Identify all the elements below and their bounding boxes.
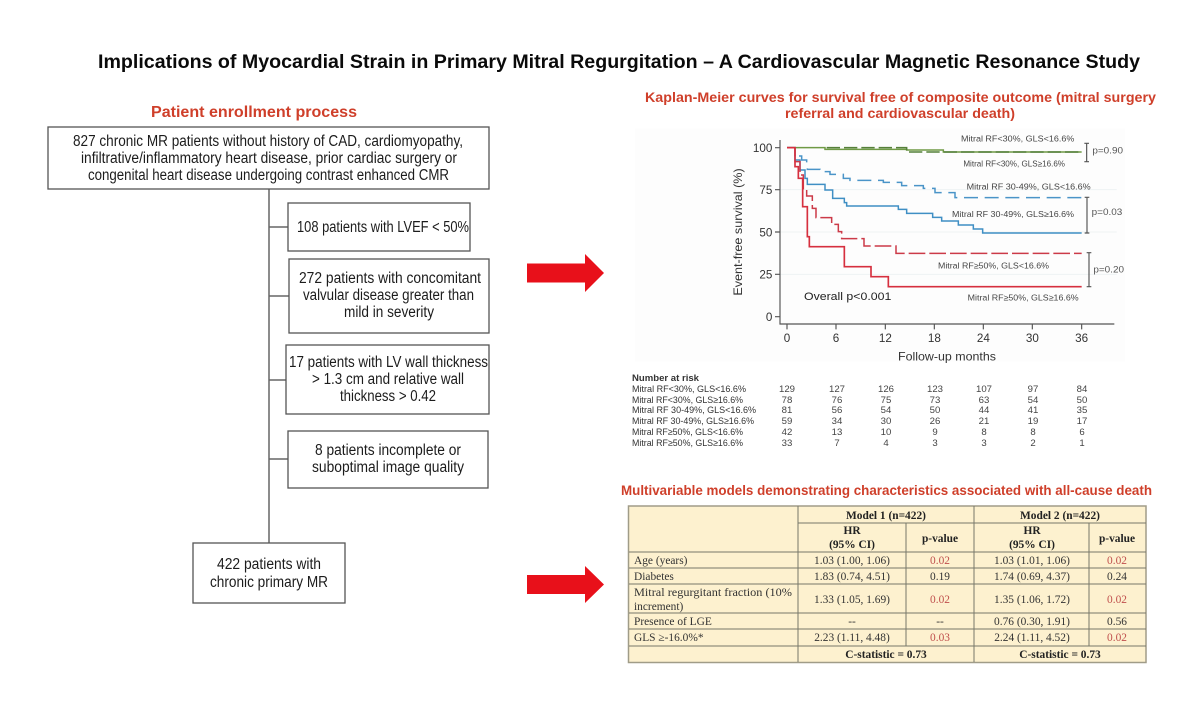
table: number at risk: 26 <box>930 416 940 427</box>
table: number at risk: 84 <box>1077 384 1088 395</box>
table: number at risk: 56 <box>832 405 842 416</box>
heading: Kaplan-Meier curves <box>645 90 1156 121</box>
model 1 values: 0.02 <box>930 555 950 567</box>
model 1 values: 1.03 (1.00, 1.06) <box>814 555 890 567</box>
table: number at risk: 42 <box>782 427 792 438</box>
heading: multivariable models: Multivariable models demonstrating characteristics associated with all-cause death <box>621 483 1152 498</box>
panel: patient enrollment flowchart <box>48 104 489 603</box>
x axis tick labels: 12 <box>879 332 892 345</box>
box: image quality exclusion: suboptimal image quality <box>312 459 464 476</box>
arrow: to Kaplan-Meier curves <box>527 254 604 292</box>
box: valvular disease exclusion: mild in severity <box>344 304 434 321</box>
table: number at risk: 41 <box>1028 405 1038 416</box>
table: number at risk: Number at risk <box>632 372 700 383</box>
box: LVEF exclusion <box>288 203 470 251</box>
model 2 values: 0.24 <box>1107 571 1127 583</box>
table header: Model 1 (n=422) <box>846 510 926 522</box>
title: Implications of Myocardial Strain in Primary Mitral Regurgitation – A Cardiovascular Magnetic Resonance Study <box>98 52 1140 73</box>
curve labels: Mitral RF<30%, GLS<16.6% <box>961 134 1075 144</box>
y axis title: Event-free survival (%) <box>732 168 745 296</box>
table: number at risk: Mitral RF<30%, GLS≥16.6% <box>632 394 743 405</box>
curve labels: Mitral RF<30%, GLS≥16.6% <box>963 158 1066 168</box>
heading: Kaplan-Meier curves: Kaplan-Meier curves for survival free of composite outcome (mitral surgery <box>645 90 1156 105</box>
table: number at risk: Mitral RF≥50%, GLS≥16.6% <box>632 437 743 448</box>
table header: Model 2 (n=422) <box>1020 510 1100 522</box>
table: number at risk: 76 <box>832 395 842 406</box>
table: number at risk: Mitral RF 30-49%, GLS≥16.6% <box>632 415 754 426</box>
curve labels: Mitral RF 30-49%, GLS<16.6% <box>967 181 1091 191</box>
table header <box>829 510 1135 551</box>
table: number at risk: 75 <box>881 395 891 406</box>
y axis tick labels: 75 <box>759 184 772 197</box>
box: final cohort: 422 patients with <box>217 556 321 573</box>
curve labels: Mitral RF≥50%, GLS<16.6% <box>938 260 1050 270</box>
brackets with p-values <box>1084 143 1124 287</box>
box: final cohort <box>193 543 345 603</box>
table: number at risk: 127 <box>829 384 845 395</box>
model 1 values: 1.33 (1.05, 1.69) <box>814 594 890 606</box>
table: number at risk: 97 <box>1028 384 1038 395</box>
x axis tick labels: 18 <box>928 332 941 345</box>
table header: p-value <box>922 533 958 545</box>
table: number at risk: 1 <box>1079 438 1085 449</box>
arrow: to multivariable table <box>527 566 604 603</box>
model 2 values: 0.56 <box>1107 616 1127 628</box>
row labels: Age (years) <box>634 555 688 567</box>
model 2 values: 2.24 (1.11, 4.52) <box>994 632 1070 644</box>
table: number at risk: 107 <box>976 384 992 395</box>
table: number at risk: 2 <box>1030 438 1036 449</box>
x axis title: Follow-up months <box>898 351 996 364</box>
table: number at risk: 59 <box>782 416 792 427</box>
model 1 values: 2.23 (1.11, 4.48) <box>814 632 890 644</box>
y axis tick labels: 50 <box>759 226 773 239</box>
box: valvular disease exclusion <box>289 259 489 333</box>
model 1 values: -- <box>936 616 944 628</box>
brackets with p-values: p=0.90 <box>1092 145 1123 155</box>
table: number at risk: 13 <box>832 427 842 438</box>
model 1 values: 0.03 <box>930 632 950 644</box>
x axis tick labels <box>784 332 1088 345</box>
curve: RF<30% GLS>=16.6% solid <box>787 148 1082 152</box>
table: number at risk: 8 <box>1030 427 1036 438</box>
table: multivariable models <box>628 506 1146 662</box>
table header: (95% CI) <box>829 539 875 551</box>
table: number at risk: 8 <box>981 427 987 438</box>
y axis tick labels: 0 <box>766 311 773 324</box>
box: valvular disease exclusion: valvular disease greater than <box>303 287 474 304</box>
axes <box>775 140 1114 329</box>
row labels: increment) <box>634 601 684 613</box>
table: number at risk: Mitral RF 30-49%, GLS<16.6% <box>632 404 756 415</box>
table: number at risk: 7 <box>834 438 840 449</box>
model 2 values <box>994 555 1127 644</box>
row labels: Diabetes <box>634 571 674 583</box>
y axis tick labels: 100 <box>753 142 773 155</box>
table: number at risk: 123 <box>927 384 943 395</box>
table: number at risk: 129 <box>779 384 795 395</box>
table: number at risk: 126 <box>878 384 894 395</box>
table header: HR <box>1023 525 1041 537</box>
y axis tick labels <box>753 142 773 324</box>
table: number at risk: 17 <box>1077 416 1087 427</box>
model 1 values: 1.83 (0.74, 4.51) <box>814 571 890 583</box>
box: image quality exclusion: 8 patients incomplete or <box>315 442 461 459</box>
table: number at risk: 3 <box>981 438 987 449</box>
table: number at risk: 73 <box>930 395 940 406</box>
C-statistic row: C-statistic = 0.73 <box>1019 649 1101 661</box>
box: LVEF exclusion: 108 patients with LVEF < 50% <box>297 219 469 236</box>
model 1 values: 0.19 <box>930 571 950 583</box>
heading: patient enrollment process: Patient enrollment process <box>151 104 357 121</box>
flow connector lines <box>269 189 289 543</box>
brackets with p-values: p=0.03 <box>1092 207 1122 217</box>
table: number at risk: 10 <box>881 427 891 438</box>
box: initial cohort: 827 chronic MR patients without history of CAD, cardiomyopathy, <box>73 133 463 150</box>
y axis tick labels: 25 <box>759 269 772 282</box>
table: number at risk: 21 <box>979 416 989 427</box>
box: wall thickness exclusion: 17 patients with LV wall thickness <box>289 354 488 371</box>
table: number at risk: 3 <box>932 438 938 449</box>
x axis tick labels: 0 <box>784 332 791 345</box>
table: number at risk: 9 <box>932 427 938 438</box>
x axis tick labels: 24 <box>977 332 990 345</box>
table: number at risk: Mitral RF≥50%, GLS<16.6% <box>632 426 743 437</box>
curve labels <box>938 134 1091 303</box>
model 1 values <box>814 555 950 644</box>
table header: (95% CI) <box>1009 539 1055 551</box>
table header: p-value <box>1099 533 1135 545</box>
table: number at risk: 50 <box>930 405 940 416</box>
model 2 values: 1.35 (1.06, 1.72) <box>994 594 1070 606</box>
curve: RF 30-49% GLS<16.6% dashed <box>799 156 1082 198</box>
table: number at risk: 35 <box>1077 405 1087 416</box>
model 2 values: 0.02 <box>1107 632 1127 644</box>
table: number at risk: 30 <box>881 416 891 427</box>
table: number at risk: 44 <box>979 405 990 416</box>
box: wall thickness exclusion: thickness > 0.42 <box>340 388 436 405</box>
table: number at risk: 63 <box>979 395 989 406</box>
table: number at risk: 78 <box>782 395 792 406</box>
C-statistic row: C-statistic = 0.73 <box>845 649 927 661</box>
model 2 values: 1.03 (1.01, 1.06) <box>994 555 1070 567</box>
curve: RF>=50% GLS>=16.6% solid <box>787 148 1082 287</box>
row labels: Presence of LGE <box>634 616 712 628</box>
box: wall thickness exclusion: > 1.3 cm and relative wall <box>312 371 464 388</box>
table: number at risk: 34 <box>832 416 843 427</box>
x axis tick labels: 36 <box>1075 332 1088 345</box>
C-statistic row <box>845 649 1101 661</box>
row labels <box>634 555 793 644</box>
x axis tick labels: 30 <box>1026 332 1039 345</box>
model 2 values: 0.02 <box>1107 555 1127 567</box>
x axis tick labels: 6 <box>833 332 839 345</box>
box: initial cohort: congenital heart disease undergoing contrast enhanced CMR <box>88 167 449 184</box>
box: initial cohort: infiltrative/inflammatory heart disease, prior cardiac surgery or <box>81 150 457 167</box>
table: number at risk: 19 <box>1028 416 1038 427</box>
model 1 values: -- <box>848 616 856 628</box>
row labels: GLS ≥-16.0%* <box>634 632 704 644</box>
table: number at risk: 81 <box>782 405 792 416</box>
box: wall thickness exclusion <box>286 345 489 414</box>
model 1 values: 0.02 <box>930 594 950 606</box>
table: number at risk: 54 <box>881 405 892 416</box>
table: number at risk: Mitral RF<30%, GLS<16.6% <box>632 383 746 394</box>
overall p-value: Overall p<0.001 <box>804 291 891 303</box>
curve: RF 30-49% GLS>=16.6% solid <box>787 148 1082 233</box>
model 2 values: 0.02 <box>1107 594 1127 606</box>
brackets with p-values: p=0.20 <box>1093 264 1124 274</box>
chart: Kaplan-Meier survival curves <box>635 128 1125 364</box>
box: final cohort: chronic primary MR <box>210 574 328 591</box>
table header: HR <box>843 525 861 537</box>
table: number at risk <box>632 372 1088 449</box>
curve labels: Mitral RF≥50%, GLS≥16.6% <box>968 293 1079 303</box>
box: image quality exclusion <box>288 431 488 488</box>
row labels: Mitral regurgitant fraction (10% <box>634 587 793 599</box>
model 2 values: 1.74 (0.69, 4.37) <box>994 571 1070 583</box>
table: number at risk: 50 <box>1077 395 1087 406</box>
box: valvular disease exclusion: 272 patients with concomitant <box>299 270 482 287</box>
table: number at risk: 6 <box>1079 427 1085 438</box>
curve: RF<30% GLS<16.6% dashed <box>827 148 1082 152</box>
curve labels: Mitral RF 30-49%, GLS≥16.6% <box>952 209 1075 219</box>
heading: Kaplan-Meier curves: referral and cardiovascular death) <box>785 106 1015 121</box>
table: number at risk: 54 <box>1028 395 1039 406</box>
table: number at risk: 33 <box>782 438 792 449</box>
curve: RF>=50% GLS<16.6% dashed <box>787 148 1082 253</box>
table: number at risk: 4 <box>883 438 889 449</box>
model 2 values: 0.76 (0.30, 1.91) <box>994 616 1070 628</box>
box: initial cohort <box>48 127 489 189</box>
